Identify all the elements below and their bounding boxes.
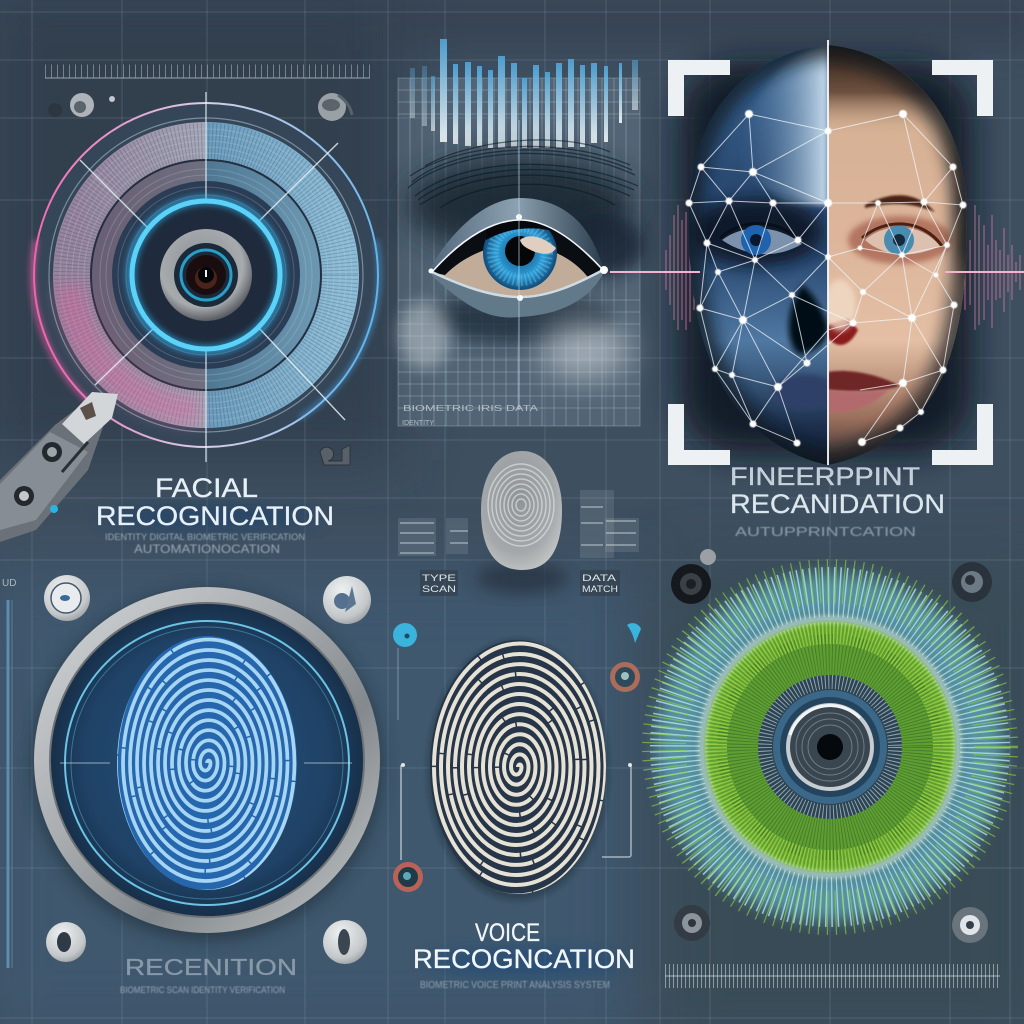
small label right (580, 570, 620, 596)
corner brackets (668, 60, 993, 465)
panel: facial recognition scanner (0, 71, 440, 556)
small label left: SCAN (422, 584, 456, 594)
caption: authentication: IDENTITY DIGITAL BIOMETRIC VERIFICATION (105, 532, 305, 542)
bracket (602, 763, 632, 857)
caption: authentication (105, 532, 305, 556)
knob bottom left (46, 922, 86, 962)
knob top right (323, 576, 371, 624)
camera lens with glowing ring (131, 200, 281, 350)
panel: green voice sensor (664, 549, 1000, 976)
eye (425, 120, 610, 410)
caption: BIOMETRIC SCAN IDENTITY VERIFICATION (120, 985, 285, 996)
panel: iris recognition (398, 39, 645, 427)
waveform behind face (666, 205, 1020, 330)
heading: fingerprint recognition: RECANIDATION (730, 489, 945, 519)
vertical progress bar: UD (2, 578, 16, 589)
heading: facial recognition (96, 473, 334, 531)
waveform strip bottom (665, 964, 1000, 988)
robot arm (0, 392, 118, 542)
thumb (481, 451, 562, 570)
mesh nodes (686, 110, 966, 446)
heading: facial recognition: FACIAL (155, 473, 258, 503)
knob top left (44, 575, 90, 621)
panel: centre thumbprint (398, 451, 639, 596)
caption: BIOMETRIC VOICE PRINT ANALYSIS SYSTEM (420, 980, 610, 991)
crosshair lines (0, 92, 440, 462)
blue fingerprint (116, 630, 302, 892)
grid behind eye (398, 78, 640, 426)
cyan marker (393, 623, 417, 720)
small clip icon (320, 445, 350, 465)
knob bottom right (323, 920, 367, 964)
small knob left (48, 93, 115, 117)
heading: fingerprint recognition: FINEERPPINT (730, 463, 920, 491)
bottom marker (393, 763, 423, 892)
data caption under eye (402, 404, 539, 427)
knob bottom right (952, 907, 988, 943)
face (680, 40, 980, 470)
black and white fingerprint (427, 634, 612, 900)
eyebrow (408, 140, 638, 208)
small label right: MATCH (582, 584, 618, 594)
horizontal signal line (610, 271, 1024, 273)
side text panels (398, 490, 639, 558)
caption: AUTUPPRINTCATION (735, 524, 916, 539)
knob top left (671, 549, 716, 604)
small label right: DATA (582, 573, 616, 583)
heading: facial recognition: RECOGNICATION (96, 501, 334, 531)
face right half (828, 45, 967, 465)
scanner ring (31, 587, 383, 941)
radial burst (664, 581, 996, 913)
data caption under eye: BIOMETRIC IRIS DATA (403, 404, 539, 413)
right marker (610, 623, 641, 692)
sensor lens (758, 675, 902, 819)
small label left (420, 570, 458, 596)
bar chart above eye (410, 39, 638, 148)
heading: voice recognition: RECOGNCATION (413, 944, 635, 974)
heading: voice recognition: VOICE (475, 919, 540, 947)
knob top right (952, 562, 992, 602)
knob bottom left (674, 905, 710, 941)
heading: voice recognition (413, 919, 635, 976)
mesh lines (689, 114, 963, 443)
panel: face mesh (610, 40, 1024, 539)
shadow around eye (405, 157, 635, 253)
heading: fingerprint recognition (730, 463, 945, 519)
heading: recognition: RECENITION (125, 954, 297, 980)
small label left: TYPE (422, 573, 456, 583)
small knob right (318, 93, 352, 121)
dark backdrop (680, 62, 972, 454)
data caption under eye: IDENTITY (402, 420, 434, 427)
panel: fingerprint scanner (2, 575, 383, 996)
scanner rings (33, 103, 379, 447)
tick strip top left (45, 71, 370, 78)
face left half (688, 45, 828, 465)
panel: voice recognition fingerprint (393, 623, 641, 991)
thumb shadow (476, 562, 568, 594)
centre seam (827, 40, 829, 465)
caption: authentication: AUTOMATIONOCATION (134, 542, 280, 556)
